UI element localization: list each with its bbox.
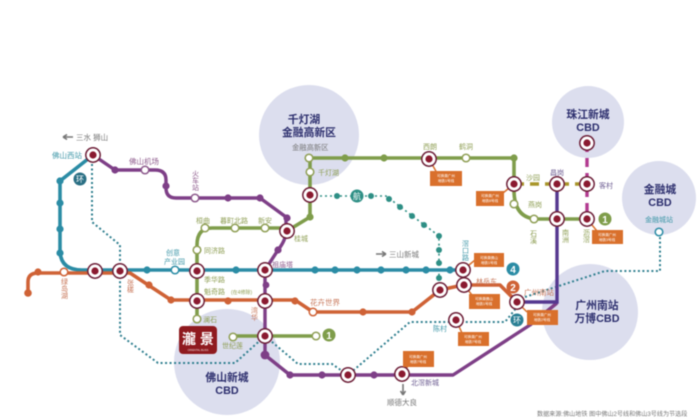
station labels (52, 132, 687, 418)
line badges: 2 (510, 283, 516, 294)
line: orange line 3 (24, 268, 517, 316)
station labels: 新安 (258, 216, 272, 225)
station labels: 桂城 (294, 234, 308, 243)
callout tags: transfer notes: 地铁8号线 (482, 198, 499, 203)
station labels: 花卉世界 (310, 297, 340, 307)
circle: 金融城 CBD zone (622, 161, 696, 235)
CBD title: 广州南站: 万博CBD (574, 311, 620, 325)
station labels: 沥滘 (582, 228, 590, 244)
line: purple line (93, 155, 557, 379)
circle: 广州南站 CBD zone (542, 264, 638, 360)
dotted line: 航 airport line (310, 190, 442, 290)
station labels: 魁奇路 (204, 287, 225, 296)
station labels: 数据来源:佛山地铁 图中佛山2号线和佛山3号线为节选段 (537, 410, 687, 418)
station labels: 陈村 (433, 324, 447, 333)
dotted line: 航 airport line: 航 (353, 191, 361, 201)
station labels: 南洲 (562, 228, 569, 243)
station labels: 燕岗 (528, 200, 542, 209)
station labels: (在4修除) (231, 289, 252, 296)
callout tags: transfer notes: 地铁7号线 (465, 339, 482, 344)
station labels: 绿岛湖 (60, 277, 68, 300)
line badges: 环 (76, 175, 84, 184)
callout tags: transfer notes: 地铁2号线 (534, 317, 551, 322)
callout tags: transfer notes: 可换乘佛山 (475, 297, 493, 301)
station labels: 佛山机场 (129, 156, 159, 166)
callout tags: transfer notes: 地铁7号线 (410, 359, 427, 364)
callout tags: transfer notes: 可换乘广州 (481, 194, 499, 198)
station labels: 昌岗 (550, 169, 564, 177)
line: teal loop and line 4 (56, 155, 463, 274)
logo: 瀧景: 瀧 景 (182, 331, 214, 347)
ordinary stations (60, 154, 663, 341)
line badges: 4 (510, 265, 516, 276)
callout tags: transfer notes: 可换乘广州 (598, 233, 616, 237)
callout tags: transfer notes: 可换乘广州 (533, 313, 551, 317)
station labels: 湾华 (250, 306, 258, 322)
line badges: 1 (326, 331, 332, 342)
circle: 佛山新城 CBD zone (174, 309, 280, 415)
station labels: 石溪 (530, 230, 537, 245)
callout tags: transfer notes: 地铁3号线 (599, 237, 616, 242)
station labels: 暮町北路 (220, 216, 248, 225)
CBD title: 广州南站: 广州南站 (575, 300, 619, 312)
arrow: 三山新城 (376, 252, 386, 256)
station labels: 桓曲 (196, 216, 210, 225)
station labels: 火车站 (192, 170, 199, 192)
arrow: 三水 狮山 (63, 134, 73, 140)
dashed lines: 珠江新城 connectors (515, 143, 587, 219)
station labels: 金融城站 (645, 215, 673, 224)
line: green line north (197, 154, 588, 336)
line badges (74, 172, 612, 342)
station labels: 沙园 (526, 174, 540, 182)
CBD title: 千灯湖: 千灯湖 (288, 114, 320, 126)
station labels: 北滘新城 (411, 378, 439, 387)
callout tags: transfer notes: 可换乘广州 (437, 174, 455, 178)
station labels: 产业园 (164, 257, 185, 266)
CBD title: 佛山新城: CBD (215, 385, 239, 397)
station labels: 广州南站 (524, 287, 554, 297)
station labels: 澜石 (203, 315, 217, 324)
station labels: 三水 狮山 (76, 132, 108, 142)
dotted line: 环 loop (92, 155, 660, 375)
callout tags: transfer notes: 地铁1号线 (438, 178, 455, 183)
callout tags: transfer notes: 可换乘广州 (409, 355, 427, 359)
logo: 瀧景 (179, 326, 217, 354)
station labels: 滘口路 (462, 239, 469, 262)
circle: 千灯湖 CBD zone (259, 85, 359, 185)
station labels: 张槎 (126, 278, 134, 294)
arrow: 顺德大良 (400, 384, 406, 395)
circle: 珠江新城 CBD zone (552, 86, 624, 158)
station labels: 林岳东 (476, 277, 497, 286)
callout leaders (402, 159, 597, 374)
callout tags: transfer notes: 地铁1号线 (476, 301, 493, 306)
CBD title: 珠江新城: 珠江新城 (566, 109, 610, 121)
station labels: 同济路 (204, 246, 225, 255)
line badges: 1 (602, 215, 608, 226)
logo: 瀧景: ORIENTAL BLISS (188, 348, 209, 352)
callout tags: transfer notes: 可换乘佛山 (480, 256, 498, 260)
station labels: 客村 (599, 181, 613, 190)
callout tags: transfer notes: 可换乘广州 (464, 335, 482, 339)
station labels: 鹤洞 (459, 142, 473, 151)
station labels: 季华路 (204, 275, 225, 284)
station labels: 金融高新区 (292, 143, 328, 152)
CBD title: 佛山新城: 佛山新城 (205, 372, 249, 384)
station labels: 世纪莲 (222, 341, 243, 350)
station labels: 佛山西站 (52, 150, 82, 160)
CBD title: 珠江新城: CBD (576, 122, 600, 134)
station labels: 创意 (166, 248, 180, 257)
callout tags: transfer notes: 地铁1号线 (481, 260, 498, 265)
station labels: 三山新城 (389, 249, 419, 259)
station labels: 西朗 (423, 142, 437, 151)
station labels: 顺德大良 (387, 397, 417, 407)
CBD title: 金融城: 金融城 (644, 184, 676, 196)
CBD title: 千灯湖: 金融高新区 (282, 125, 336, 139)
CBD title: 金融城: CBD (648, 197, 672, 209)
station labels: 祖庙塔 (272, 260, 293, 269)
station labels: 千灯湖 (318, 168, 339, 177)
line badges: 环 (513, 316, 521, 325)
callout tags: transfer notes (403, 171, 623, 367)
transfer stations (86, 136, 594, 382)
